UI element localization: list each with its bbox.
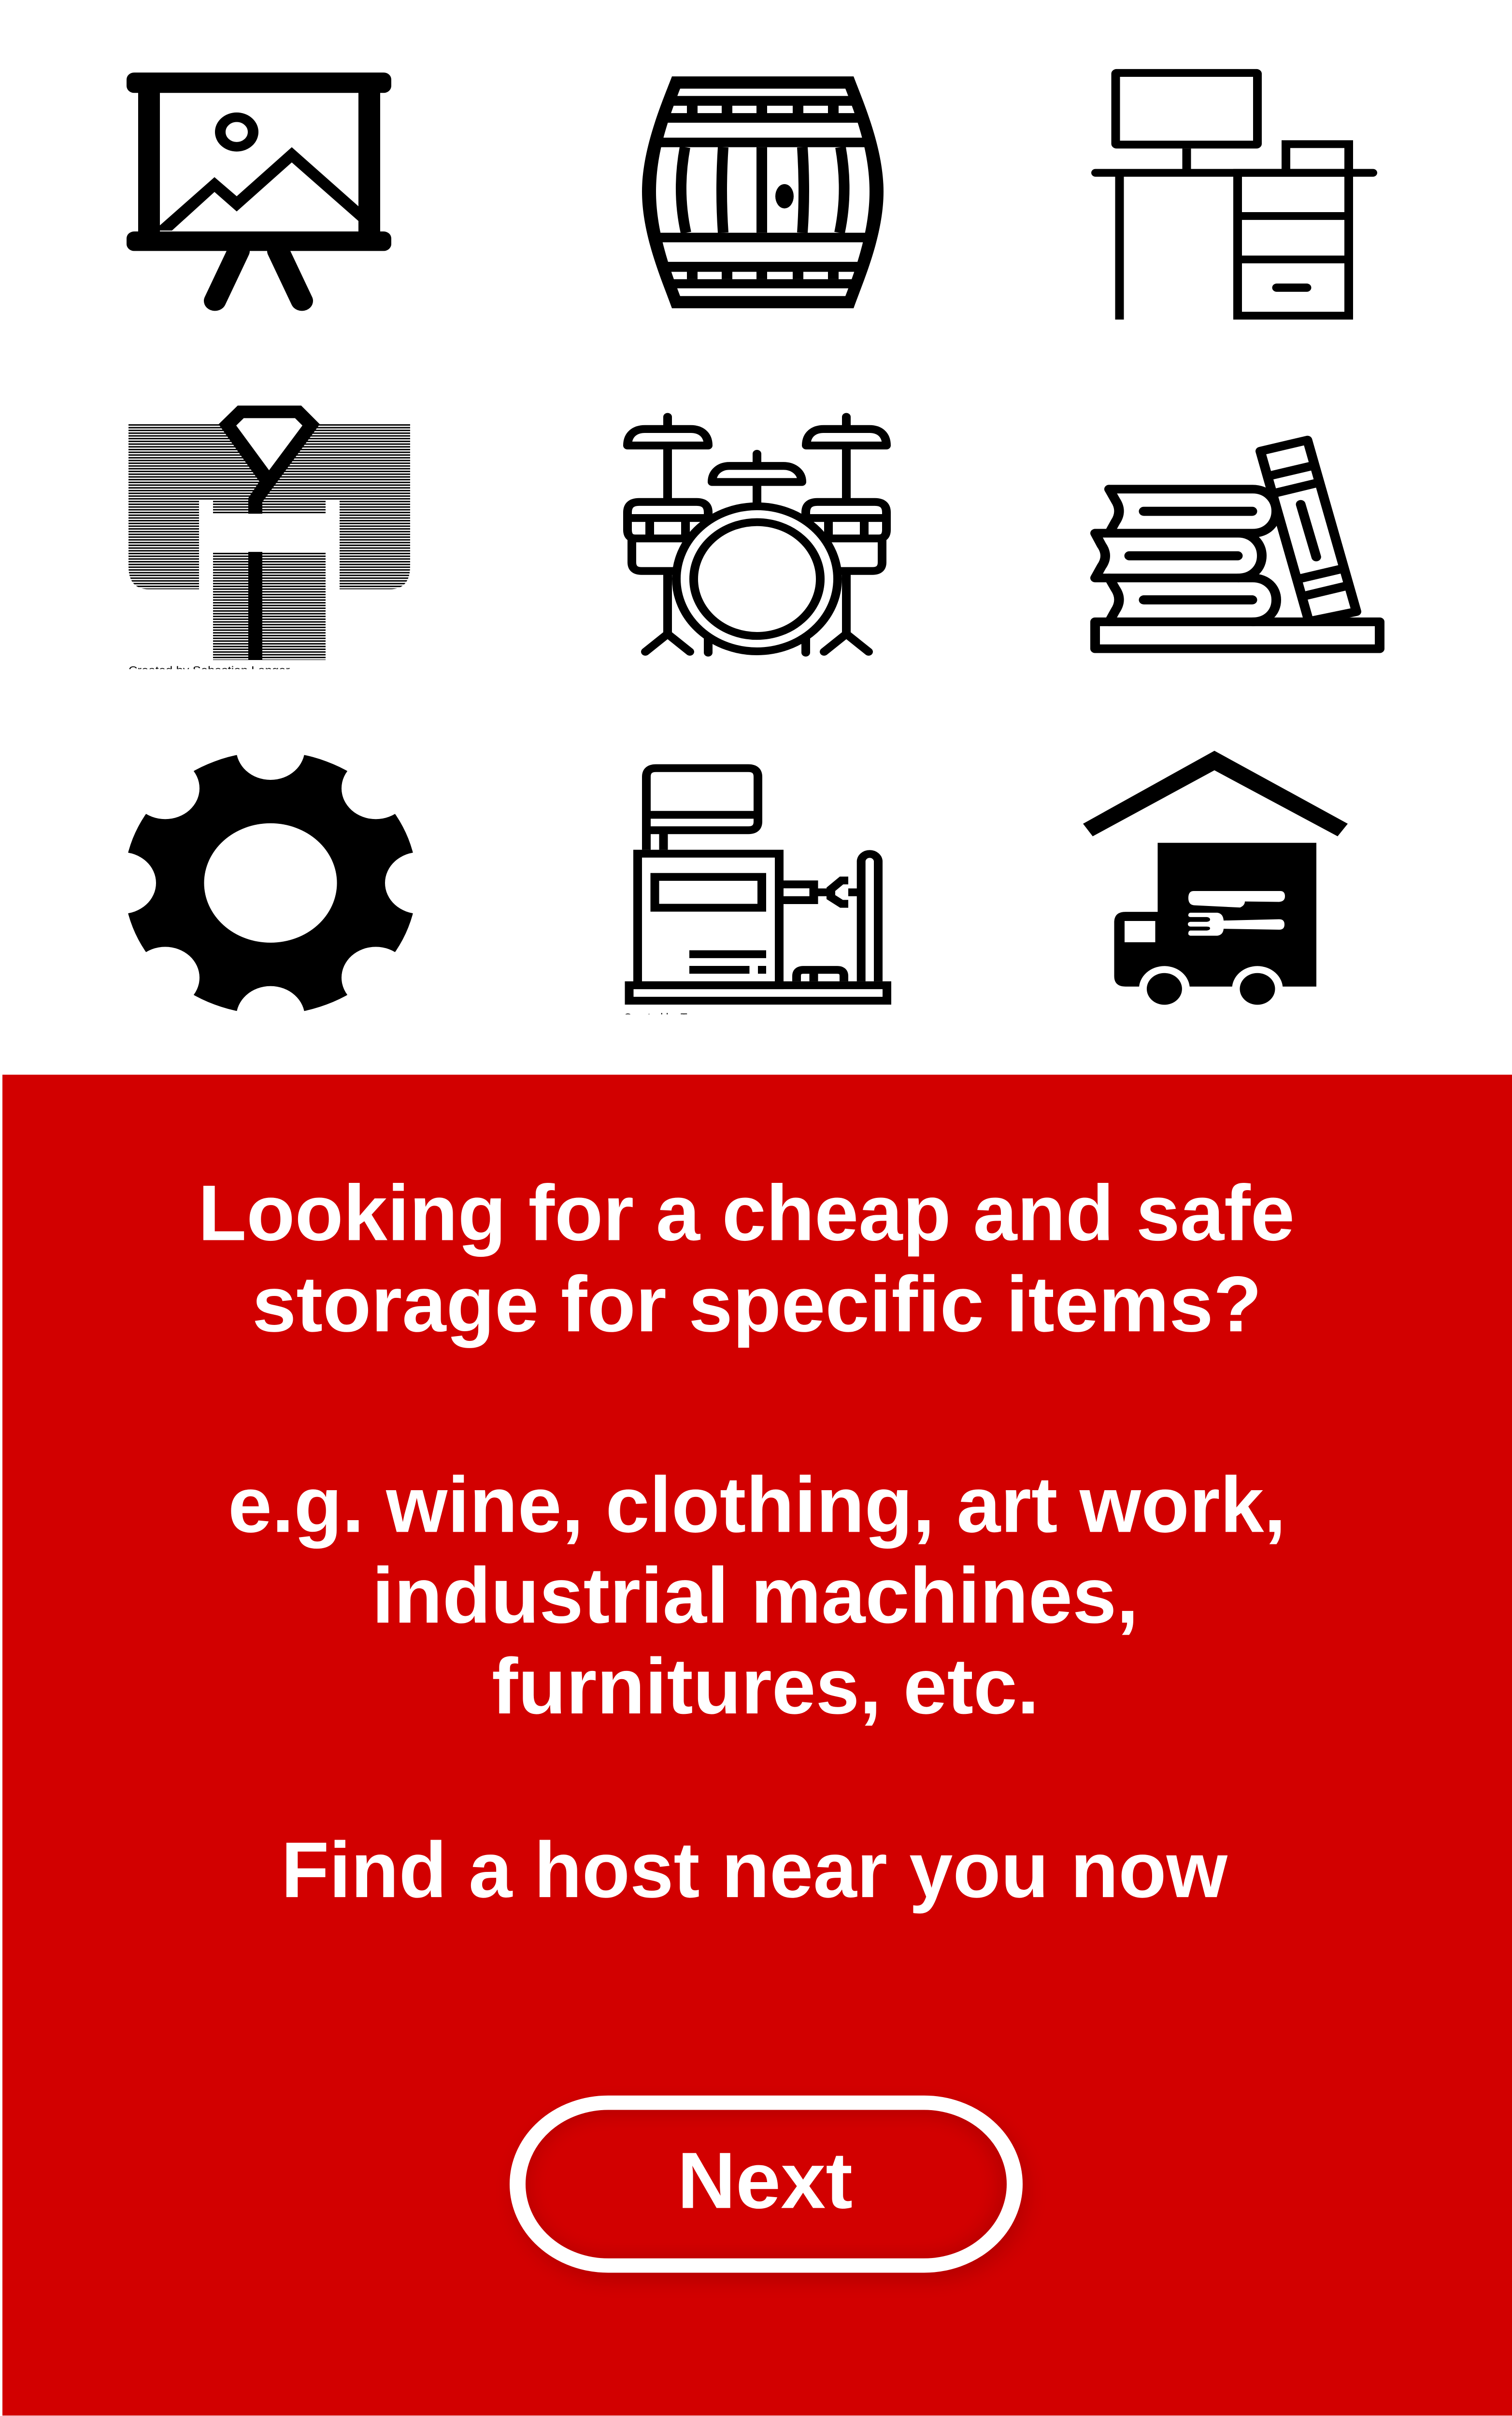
text block: examples: e.g. wine, clothing, art work, [228, 1460, 1286, 1549]
button: next: Next [677, 2136, 853, 2225]
heading: looking for storage: Looking for a cheap and safe [198, 1168, 1295, 1257]
icon: industrial machine: Created by Tomas [624, 1011, 713, 1023]
icon: drum kit [628, 417, 886, 653]
text block: find a host: Find a host near you now [281, 1826, 1227, 1914]
text block: examples [228, 1460, 1286, 1730]
heading: looking for storage: storage for specific items? [252, 1260, 1262, 1348]
icon: gear [87, 718, 454, 1048]
panel: red call to action [2, 1075, 1512, 2416]
icon: stack of books [1095, 440, 1380, 649]
icon: industrial machine [624, 768, 887, 1023]
button: next [510, 2096, 1027, 2281]
text block: examples: industrial machines, [372, 1551, 1139, 1639]
icon: desk with monitor [1096, 73, 1373, 319]
icon: food truck under roof [1083, 751, 1348, 1012]
heading: looking for storage [198, 1168, 1295, 1348]
text block: examples: furnitures, etc. [492, 1642, 1039, 1730]
icon: wine barrel [642, 76, 884, 308]
icon: art easel [127, 72, 391, 301]
icon: kimono [128, 405, 410, 676]
icon: kimono: Created by Sebastian Langer [128, 664, 290, 676]
